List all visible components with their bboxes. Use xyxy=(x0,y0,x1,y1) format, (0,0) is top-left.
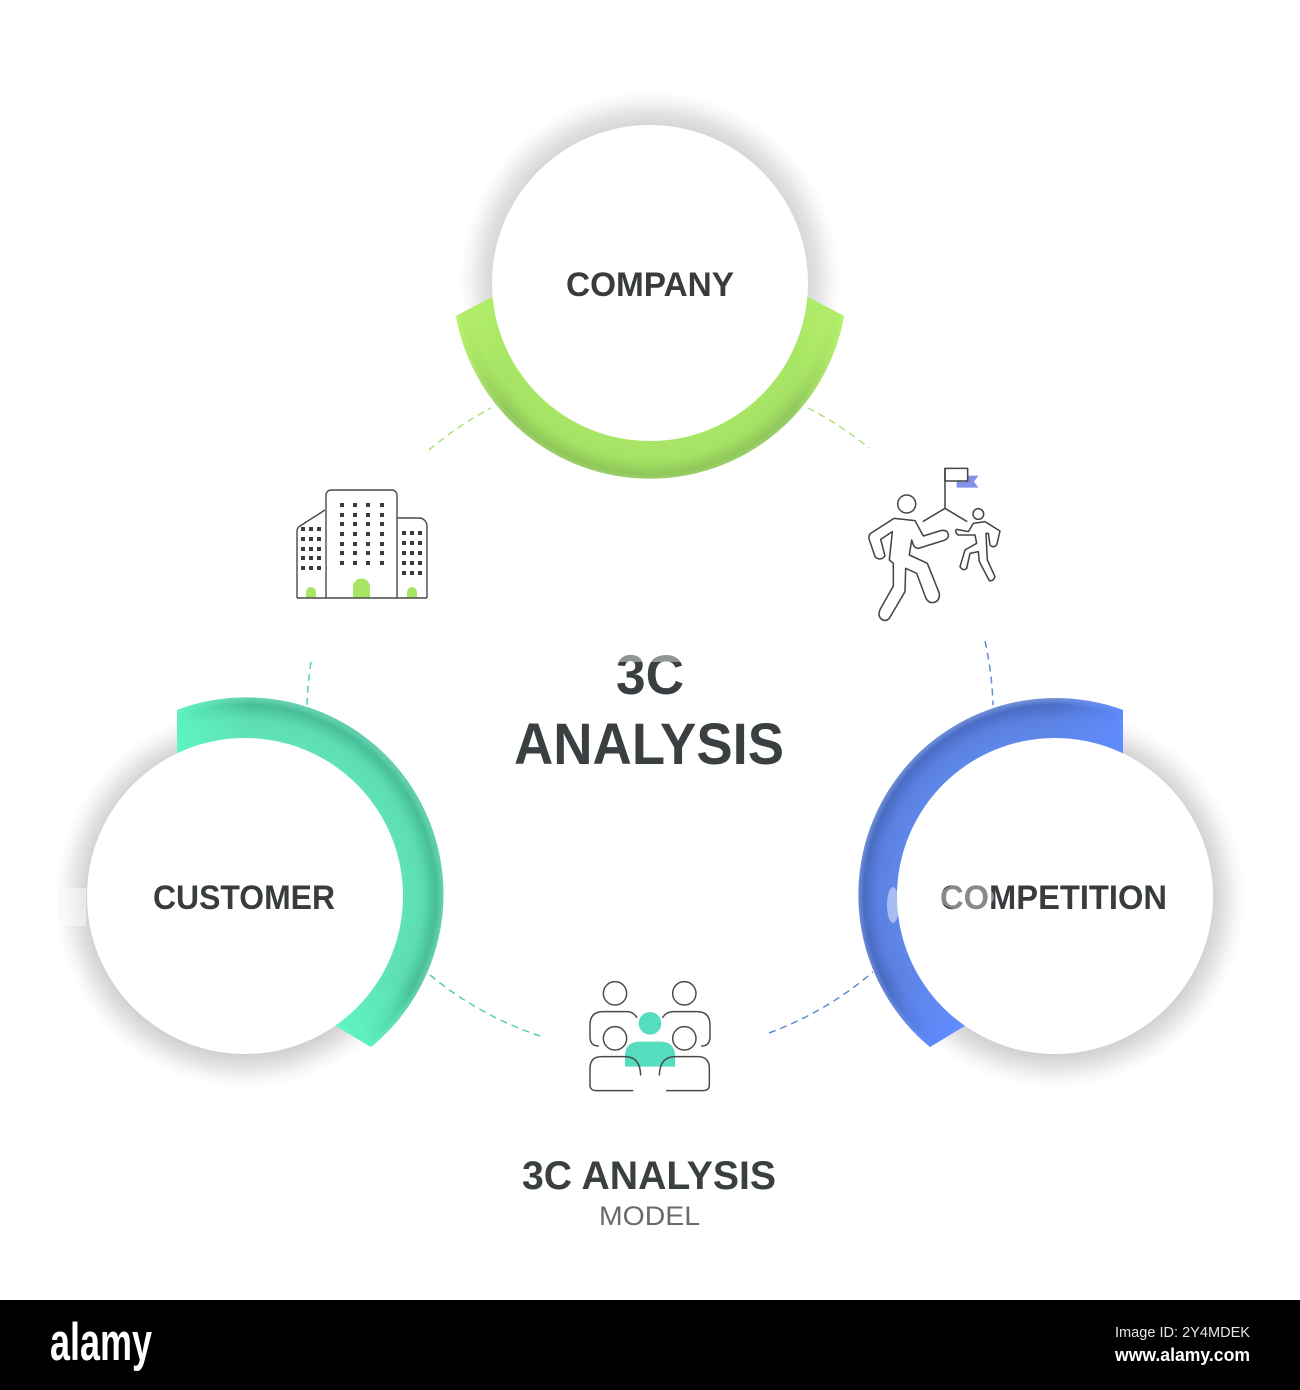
caption: 3C Analysis Model: MODEL xyxy=(599,1201,700,1231)
title: 3C Analysis: ANALYSIS xyxy=(514,712,784,777)
icon: people racing to a flag xyxy=(869,468,1000,620)
title: 3C Analysis xyxy=(514,643,784,777)
customer teal ring xyxy=(177,697,443,1047)
caption: 3C Analysis Model: 3C ANALYSIS xyxy=(522,1154,776,1198)
company label: COMPANY xyxy=(566,266,734,304)
icon: team of people xyxy=(590,982,710,1091)
panel: competition xyxy=(858,698,1245,1088)
footer logo: alamy xyxy=(50,1313,152,1372)
customer label: CUSTOMER xyxy=(153,879,335,917)
panel: company xyxy=(456,91,844,479)
dashed connector arcs xyxy=(307,408,993,1036)
title: 3C Analysis: 3C xyxy=(616,643,684,706)
caption: 3C Analysis Model xyxy=(522,1154,776,1231)
icon: office buildings xyxy=(297,490,427,598)
footer band xyxy=(0,1300,1300,1390)
footer image id: Image ID: 2Y4MDEK xyxy=(1115,1324,1250,1341)
panel: customer xyxy=(55,697,443,1088)
company green ring xyxy=(456,276,844,479)
competition blue ring xyxy=(858,698,1123,1047)
footer url: www.alamy.com xyxy=(1114,1345,1250,1365)
competition label: COMPETITION xyxy=(940,879,1167,917)
